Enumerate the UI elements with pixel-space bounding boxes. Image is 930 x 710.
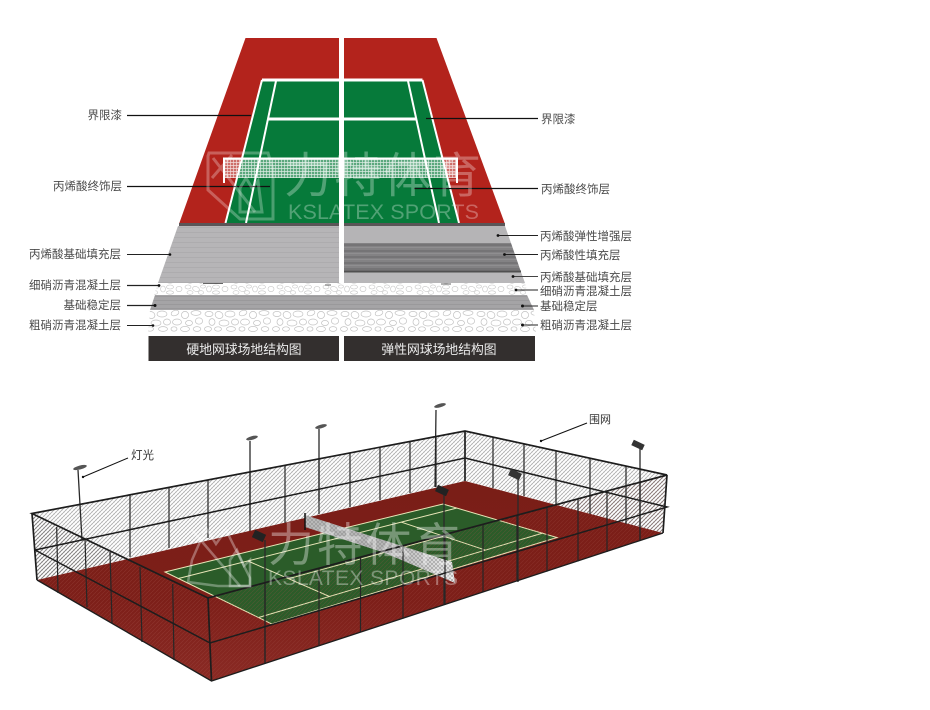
dark band under surface bbox=[179, 223, 505, 226]
label: light: 灯光 bbox=[131, 448, 154, 462]
centre divider bbox=[339, 38, 344, 283]
net bbox=[305, 513, 455, 583]
label: acrylic finish left: 丙烯酸终饰层 bbox=[53, 179, 122, 193]
label: base layer left: 基础稳定层 bbox=[64, 298, 121, 312]
fence rails and corners bbox=[32, 431, 667, 681]
label: acrylic base filler right bbox=[512, 270, 632, 284]
label: fine asphalt right bbox=[515, 284, 632, 298]
caption bar: elastic court: 弹性网球场地结构图 bbox=[381, 342, 497, 357]
label: fence bbox=[540, 413, 611, 442]
label: fine asphalt right: 细硝沥青混凝土层 bbox=[540, 284, 632, 298]
watermark: bottom: KSLATEX SPORTS bbox=[268, 567, 458, 590]
left layer: acrylic base filler bbox=[158, 226, 339, 283]
diagram: fenced tennis court perspective bbox=[32, 402, 667, 681]
court lines bbox=[165, 504, 557, 624]
label: elastic filler right: 丙烯酸性填充层 bbox=[540, 248, 620, 262]
watermark logo bbox=[208, 153, 273, 219]
label: fine asphalt left: 细硝沥青混凝土层 bbox=[29, 278, 121, 292]
label: acrylic finish right: 丙烯酸终饰层 bbox=[541, 182, 610, 196]
label: base layer right: 基础稳定层 bbox=[540, 299, 598, 313]
right layer: acrylic base filler bbox=[344, 272, 525, 283]
red surround bbox=[179, 38, 505, 224]
caption bar: hard court: 硬地网球场地结构图 bbox=[186, 342, 302, 357]
back fence mesh bbox=[32, 431, 465, 580]
base stabilising layer bbox=[150, 295, 534, 310]
right labels bbox=[414, 113, 632, 332]
right layer: elastic filler bbox=[344, 243, 521, 272]
label: light bbox=[82, 448, 154, 478]
watermark logo bbox=[188, 528, 250, 586]
label: coarse asphalt left bbox=[29, 318, 154, 332]
caption bar: elastic court bbox=[344, 336, 535, 361]
label: acrylic base filler left: 丙烯酸基础填充层 bbox=[29, 247, 121, 261]
label: elastic reinforcement right bbox=[497, 229, 632, 243]
court lines bbox=[226, 80, 459, 223]
watermark text: 力特体育 bbox=[268, 519, 460, 571]
lamp poles bbox=[78, 410, 640, 663]
watermark: top bbox=[208, 150, 481, 224]
label: fence: 围网 bbox=[589, 413, 611, 426]
watermark: top: KSLATEX SPORTS bbox=[288, 200, 479, 224]
watermark text: 力特体育 bbox=[284, 150, 481, 203]
green court bbox=[225, 80, 459, 223]
floor bbox=[37, 481, 663, 681]
label: elastic filler right bbox=[503, 248, 620, 262]
caption bar: hard court bbox=[148, 336, 339, 361]
right layer: elastic reinforcement bbox=[344, 226, 511, 243]
fence posts bbox=[57, 436, 640, 663]
lamp heads bbox=[73, 402, 645, 542]
watermark: bottom bbox=[188, 519, 460, 590]
label: base layer left bbox=[64, 298, 156, 312]
label: base layer right bbox=[521, 299, 598, 313]
tennis net bbox=[224, 158, 457, 183]
label: coarse asphalt right: 粗硝沥青混凝土层 bbox=[540, 318, 632, 332]
label: elastic reinforcement right: 丙烯酸弹性增强层 bbox=[540, 229, 632, 243]
green court bbox=[165, 504, 557, 624]
front fence mesh bbox=[32, 514, 212, 681]
left labels bbox=[29, 109, 270, 332]
label: fine asphalt left bbox=[29, 278, 160, 292]
diagram: court structure cross-section bbox=[148, 38, 536, 361]
coarse asphalt layer bbox=[148, 310, 536, 333]
label: boundary paint left: 界限漆 bbox=[88, 109, 122, 122]
label: acrylic base filler right: 丙烯酸基础填充层 bbox=[540, 270, 632, 284]
label: boundary paint right: 界限漆 bbox=[541, 113, 576, 126]
label: coarse asphalt left: 粗硝沥青混凝土层 bbox=[29, 318, 121, 332]
fine asphalt layer bbox=[154, 283, 528, 295]
